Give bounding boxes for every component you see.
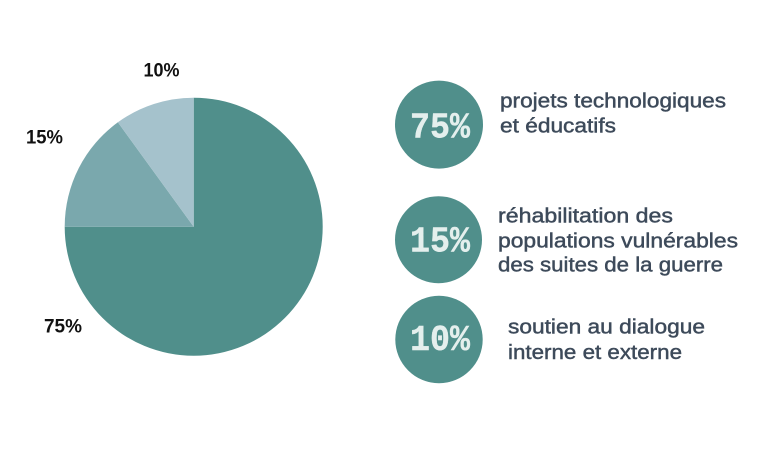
item: 15%: [395, 196, 738, 283]
item text: populations vulnérables: [498, 230, 738, 252]
item text: soutien au dialogue: [508, 316, 705, 338]
pie label: 15%: 15%: [26, 127, 63, 148]
slice: 15%: [65, 122, 194, 227]
slice: 75%: [65, 98, 323, 356]
badge number: 10%: [410, 320, 470, 361]
badge circle: [395, 196, 482, 283]
slice: 10%: [118, 98, 194, 227]
badge circle: [395, 81, 483, 169]
item: 75%: [395, 81, 726, 169]
item: 10%: [395, 296, 705, 383]
pie label: 75%: 75%: [44, 317, 82, 338]
item text: réhabilitation des: [498, 205, 673, 227]
item text: [508, 316, 705, 364]
item text: projets technologiques: [500, 91, 726, 113]
pie chart: [65, 98, 323, 356]
item text: [498, 205, 738, 277]
badge circle: [395, 296, 483, 383]
item text: des suites de la guerre: [498, 255, 723, 277]
pie label: 10%: 10%: [144, 61, 180, 82]
item text: et éducatifs: [500, 115, 616, 137]
item text: [500, 91, 726, 137]
item text: interne et externe: [508, 342, 682, 364]
badge number: 15%: [410, 222, 470, 262]
badge number: 75%: [410, 107, 470, 148]
